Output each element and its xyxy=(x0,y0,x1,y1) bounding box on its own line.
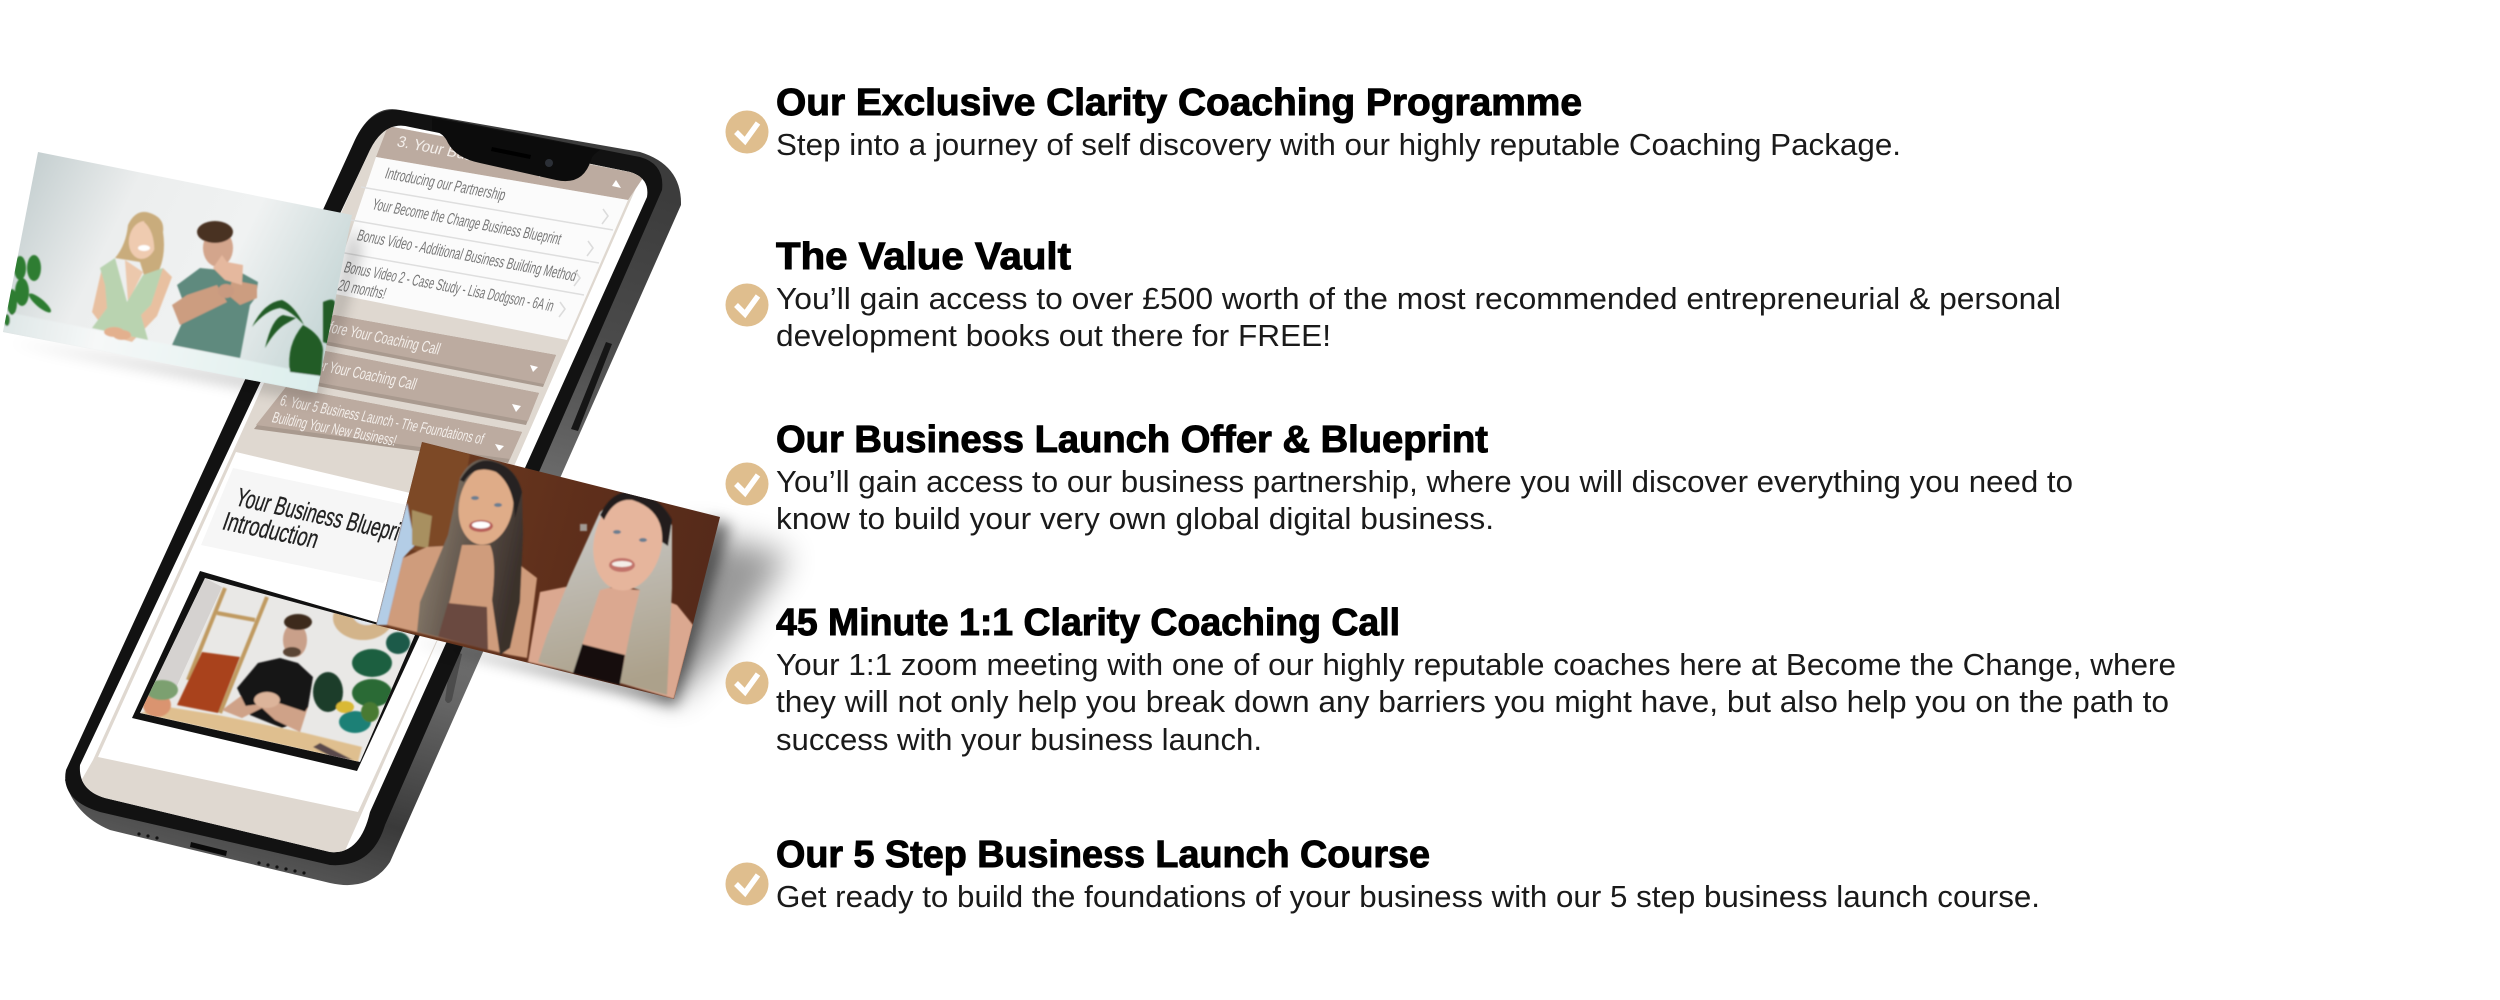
table xyxy=(140,707,362,762)
right plant xyxy=(252,300,335,376)
benefits list xyxy=(726,82,2176,914)
cushion xyxy=(412,510,432,548)
screen white rim xyxy=(80,126,648,852)
pot plant xyxy=(143,693,171,717)
description: You’ll gain access to over £500 worth of the most recommended entrepreneurial & personal xyxy=(776,281,2061,316)
ladder xyxy=(188,588,267,713)
red blanket xyxy=(177,652,240,713)
accordion white panel: Bonus Video 2 - Case Study - Lisa Dodgson - 6A in xyxy=(342,259,556,315)
lesson title card: Your Business Blueprint xyxy=(232,484,418,550)
woman xyxy=(92,212,172,342)
blue curtain xyxy=(376,503,415,625)
icon: check badge xyxy=(726,862,768,906)
description: success with your business launch. xyxy=(776,722,1262,757)
phone black bezel xyxy=(65,110,662,865)
collapsed bar: business launch: 6. Your 5 Business Launch - The Foundations of xyxy=(278,392,487,448)
collapsed bar: after coaching call: 5. After Your Coaching Call xyxy=(292,352,419,394)
description: they will not only help you break down any barriers you might have, but also help you on the path to xyxy=(776,684,2169,719)
accordion white panel xyxy=(330,157,628,340)
photo card: couple at table xyxy=(3,152,362,402)
heading: Our Exclusive Clarity Coaching Programme xyxy=(776,82,1582,124)
video thumbnail xyxy=(130,570,430,771)
description: development books out there for FREE! xyxy=(776,318,1331,353)
presenter xyxy=(223,695,308,726)
heading: Our 5 Step Business Launch Course xyxy=(776,834,1430,876)
phone mockup xyxy=(60,100,681,885)
item 3: business launch offer xyxy=(726,419,2073,536)
item 4: coaching call xyxy=(726,602,2176,757)
collapsed bar: business launch xyxy=(254,387,522,463)
phone notch xyxy=(432,118,600,181)
section header bar: 3. Your Business Blueprint xyxy=(395,133,573,183)
collapsed bar: after coaching call xyxy=(318,351,539,425)
heading: Our Business Launch Offer & Blueprint xyxy=(776,419,1488,461)
collapsed bar: business launch: Building Your New Business! xyxy=(270,409,399,450)
large soft shadow xyxy=(640,530,790,700)
description: Step into a journey of self discovery with our highly reputable Coaching Package. xyxy=(776,127,1901,162)
lesson content panel xyxy=(98,452,437,812)
wall switch xyxy=(580,524,587,531)
collapsed bar: before coaching call xyxy=(326,315,556,387)
side button xyxy=(571,342,612,431)
accordion white panel: Bonus Video - Additional Business Building Method xyxy=(355,227,579,285)
infographic canvas xyxy=(3,87,2175,914)
table top xyxy=(3,312,320,393)
section header bar xyxy=(376,126,645,200)
lesson title card xyxy=(202,468,406,583)
description xyxy=(776,464,2073,536)
heading: 45 Minute 1:1 Clarity Coaching Call xyxy=(776,602,1400,644)
item 5: launch course xyxy=(726,834,2040,914)
woman right xyxy=(528,487,693,699)
description: Your 1:1 zoom meeting with one of our highly reputable coaches here at Become the Change, where xyxy=(776,647,2176,682)
accordion white panel: 20 months! xyxy=(336,277,388,303)
phone metal body xyxy=(65,109,681,885)
phone screen xyxy=(80,126,648,852)
plants xyxy=(386,632,410,654)
item 2: value vault xyxy=(726,236,2061,353)
lesson title card: Introduction xyxy=(219,508,323,554)
woman left xyxy=(387,459,537,658)
item 1: clarity coaching programme xyxy=(726,82,1901,162)
bottom speaker and port xyxy=(137,832,306,875)
page beige column xyxy=(70,125,643,862)
icon: check badge xyxy=(726,662,768,704)
heading: The Value Vault xyxy=(776,236,1071,278)
photo shadow xyxy=(8,225,362,402)
description: Get ready to build the foundations of your business with our 5 step business launch course. xyxy=(776,879,2040,914)
icon: check badge xyxy=(726,284,768,326)
icon: check badge xyxy=(726,110,768,154)
photo edge shadow xyxy=(410,520,730,706)
accordion white panel: Your Become the Change Business Blueprint xyxy=(370,196,564,248)
man xyxy=(172,221,258,358)
description xyxy=(776,647,2176,757)
description xyxy=(776,281,2061,353)
left plant xyxy=(4,255,53,326)
wooden door panel xyxy=(395,442,470,560)
mirror xyxy=(332,612,390,641)
icon: check badge xyxy=(726,462,768,506)
collapsed bar: before coaching call: 4. Before Your Coaching Call xyxy=(302,314,443,358)
accordion white panel: Introducing our Partnership xyxy=(383,165,508,204)
description: know to build your very own global digital business. xyxy=(776,501,1494,536)
description: You’ll gain access to our business partnership, where you will discover everything you need to xyxy=(776,464,2073,499)
lower side button xyxy=(445,650,462,703)
laptop on table xyxy=(313,743,353,760)
photo card: two women xyxy=(376,442,790,706)
